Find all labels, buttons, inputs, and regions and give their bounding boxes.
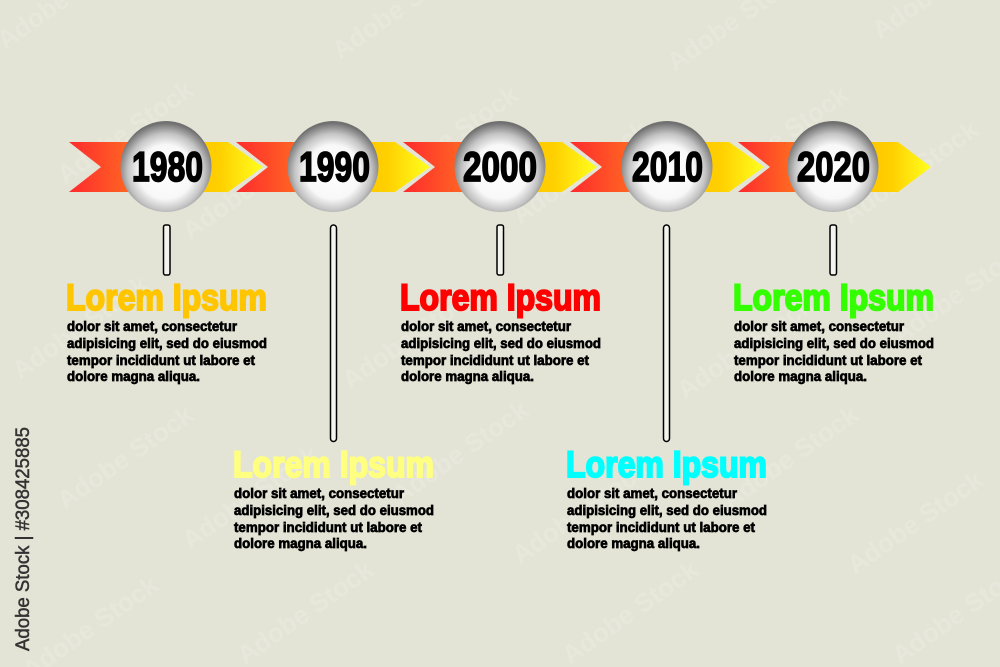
arrow segment 2010 — [570, 142, 764, 192]
watermark pattern: Adobe Stock — [716, 399, 864, 515]
body 2020 — [734, 319, 934, 384]
timeline arrow band — [69, 142, 931, 192]
arrow segment 1980 — [69, 142, 263, 192]
body 2020: dolore magna aliqua. — [734, 369, 867, 384]
body 2000: adipisicing elit, sed do eiusmod — [401, 336, 601, 351]
watermark pattern: Adobe Stock — [231, 554, 379, 667]
year badge 2010 — [622, 121, 712, 212]
year badge 2000: 2000 — [463, 143, 537, 190]
heading 2020: Lorem Ipsum — [733, 277, 934, 318]
watermark pattern: Adobe Stock — [386, 394, 534, 510]
body 2010: dolore magna aliqua. — [567, 536, 700, 551]
year badge 2000 — [454, 121, 546, 212]
heading 2010: Lorem Ipsum — [566, 444, 767, 485]
text block 2010 — [566, 444, 767, 551]
watermark pattern: Adobe Stock — [51, 74, 199, 190]
year badge 2020 — [788, 121, 878, 212]
year badge 2010: 2010 — [632, 143, 703, 190]
year badge 2020: 2020 — [797, 143, 870, 190]
arrow segment 2000 — [403, 142, 597, 192]
watermark pattern: Adobe Stock — [556, 554, 704, 667]
connector 1990 — [330, 225, 336, 442]
body 1990 — [234, 486, 434, 551]
body 2000: dolor sit amet, consectetur — [401, 319, 572, 334]
watermark pattern: Adobe Stock — [376, 79, 524, 195]
arrow segment 1990 — [236, 142, 430, 192]
body 2000: dolore magna aliqua. — [401, 369, 534, 384]
text block 2020 — [733, 277, 934, 384]
watermark pattern: Adobe Stock — [506, 114, 654, 230]
year badge 1980 — [120, 121, 212, 212]
text block 2000 — [400, 277, 601, 384]
body 1980: dolore magna aliqua. — [67, 369, 200, 384]
year badge 1990: 1990 — [299, 143, 370, 190]
connector 2010 — [664, 225, 670, 442]
body 2010: tempor incididunt ut labore et — [567, 520, 755, 535]
heading 2000: Lorem Ipsum — [400, 277, 601, 318]
year badge 1990 — [288, 121, 378, 212]
watermark pattern: Adobe Stock — [836, 114, 984, 230]
connector 2000 — [497, 225, 504, 275]
body 1990: dolor sit amet, consectetur — [234, 486, 405, 501]
body 2000 — [401, 319, 601, 384]
watermark pattern: Adobe Stock — [176, 129, 324, 245]
body 2020: tempor incididunt ut labore et — [734, 353, 922, 368]
body 2010: dolor sit amet, consectetur — [567, 486, 738, 501]
watermark pattern: Adobe Stock — [706, 79, 854, 195]
watermark pattern: Adobe Stock — [841, 464, 989, 580]
text block 1980 — [66, 277, 267, 384]
body 1980: dolor sit amet, consectetur — [67, 319, 238, 334]
body 2010: adipisicing elit, sed do eiusmod — [567, 503, 767, 518]
body 2020: dolor sit amet, consectetur — [734, 319, 905, 334]
heading 1980: Lorem Ipsum — [66, 277, 267, 318]
body 2000: tempor incididunt ut labore et — [401, 353, 589, 368]
connector 2020 — [830, 225, 836, 275]
watermark pattern: Adobe Stock — [506, 454, 654, 570]
body 1980: adipisicing elit, sed do eiusmod — [67, 336, 267, 351]
body 1990: dolore magna aliqua. — [234, 536, 367, 551]
connector 1980 — [164, 225, 170, 275]
stock id label: Adobe Stock | #308425885 — [13, 427, 34, 651]
body 2010 — [567, 486, 767, 551]
watermark pattern: Adobe Stock — [176, 439, 324, 555]
body 1990: adipisicing elit, sed do eiusmod — [234, 503, 434, 518]
text block 1990 — [233, 444, 434, 551]
heading 1990: Lorem Ipsum — [233, 444, 434, 485]
watermark pattern: Adobe Stock — [6, 269, 154, 385]
body 1980 — [67, 319, 267, 384]
watermark pattern: Adobe Stock — [336, 279, 484, 395]
body 2020: adipisicing elit, sed do eiusmod — [734, 336, 934, 351]
year badge 1980: 1980 — [132, 143, 203, 190]
arrow segment 2020 — [738, 142, 931, 192]
body 1980: tempor incididunt ut labore et — [67, 353, 255, 368]
watermark pattern: Adobe Stock — [671, 289, 819, 405]
watermark pattern: Adobe Stock — [51, 399, 199, 515]
body 1990: tempor incididunt ut labore et — [234, 520, 422, 535]
